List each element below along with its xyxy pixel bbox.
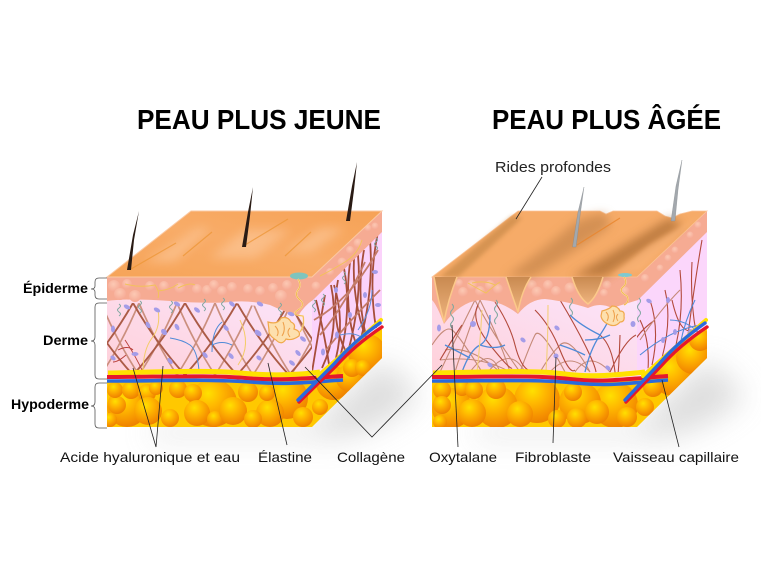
diagonal capillary bbox=[625, 320, 707, 402]
grey hairs bbox=[572, 160, 682, 247]
horizontal blood vessels bbox=[432, 372, 668, 385]
dermis front face bbox=[432, 298, 637, 378]
hairs bbox=[127, 162, 357, 270]
dermis front face bbox=[107, 298, 312, 378]
epidermis bbox=[432, 211, 707, 324]
wrinkle notches on front face bbox=[434, 277, 603, 322]
oxytalane squiggles bbox=[118, 238, 378, 316]
label: collagène: Collagène bbox=[337, 449, 405, 465]
skin surface highlights and fine lines bbox=[131, 219, 345, 269]
fat layer bbox=[432, 320, 711, 429]
label: épiderme: Épiderme bbox=[23, 281, 89, 296]
wrinkle shading bbox=[440, 214, 700, 277]
panel: younger skin block bbox=[103, 162, 420, 438]
fat layer bbox=[103, 320, 386, 428]
nerve fibres in epidermis bbox=[468, 282, 500, 293]
diagonal capillary bbox=[298, 320, 382, 402]
panel: older skin block bbox=[432, 160, 745, 438]
elastin cells bbox=[109, 270, 381, 367]
epidermis cells bbox=[108, 222, 378, 302]
label: derme: Derme bbox=[43, 333, 89, 348]
top surface with back-edge wrinkles bbox=[432, 211, 707, 277]
title: peau plus âgée: PEAU PLUS ÂGÉE bbox=[492, 104, 721, 135]
label: fibroblaste: Fibroblaste bbox=[515, 449, 591, 465]
drop shadow bbox=[150, 360, 420, 438]
collagen and elastin lattice bbox=[107, 303, 312, 375]
title: peau plus jeune: PEAU PLUS JEUNE bbox=[137, 104, 381, 135]
epidermis bbox=[107, 211, 382, 316]
label: oxytalane: Oxytalane bbox=[429, 449, 497, 465]
pore and gland duct bbox=[618, 273, 632, 305]
sparse fibres in front face bbox=[432, 300, 636, 380]
label: vaisseau capillaire: Vaisseau capillaire bbox=[613, 449, 739, 465]
oxytalane squiggles bbox=[450, 298, 640, 328]
label: élastine: Élastine bbox=[258, 449, 312, 465]
drop shadow bbox=[475, 360, 745, 438]
leader lines bbox=[133, 177, 679, 447]
label: rides profondes: Rides profondes bbox=[495, 159, 611, 176]
nerve fibres in epidermis bbox=[125, 240, 362, 298]
top surface bbox=[107, 211, 382, 277]
dermis right face bbox=[637, 228, 707, 378]
label: acide hyaluronique et eau: Acide hyaluronique et eau bbox=[60, 449, 240, 465]
brackets: skin layers bbox=[91, 278, 107, 428]
sparse fibres on right face bbox=[637, 240, 702, 368]
fibroblast gland bbox=[268, 318, 299, 343]
fibroblast gland bbox=[601, 306, 624, 326]
dermis right face bbox=[312, 228, 382, 378]
pore and gland duct bbox=[290, 272, 308, 332]
horizontal blood vessels bbox=[107, 371, 343, 383]
reddish fibres on right face bbox=[312, 232, 380, 372]
elastin cells bbox=[437, 297, 692, 371]
label: hypoderme: Hypoderme bbox=[11, 397, 90, 412]
epidermis cells bbox=[455, 222, 702, 298]
